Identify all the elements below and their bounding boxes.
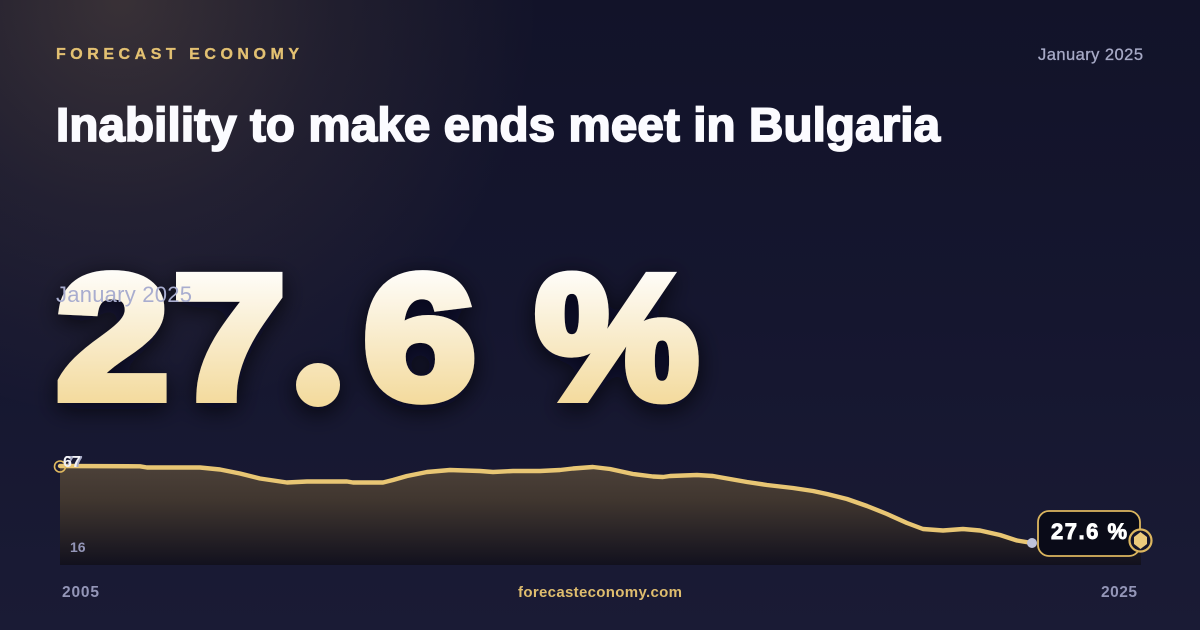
start marker xyxy=(54,461,66,472)
big value: . xyxy=(306,351,319,395)
brand label: FORECAST ECONOMY xyxy=(56,46,299,63)
website: forecasteconomy.com xyxy=(518,584,682,601)
big value: 7 xyxy=(173,239,286,436)
big value: 2 xyxy=(56,239,169,436)
trend line xyxy=(60,466,1032,543)
big value: % xyxy=(536,239,698,436)
previous point dot xyxy=(1027,538,1037,548)
big value: 6 xyxy=(363,239,476,436)
max label: 67 xyxy=(63,454,81,471)
value badge: 27.6 % xyxy=(1051,519,1127,544)
title: Inability to make ends meet in Bulgaria xyxy=(56,99,941,152)
start year: 2005 xyxy=(62,584,99,601)
area fill xyxy=(60,466,1141,565)
end marker xyxy=(1130,530,1152,552)
min label: 16 xyxy=(70,539,86,555)
date top right: January 2025 xyxy=(1038,46,1143,64)
end year: 2025 xyxy=(1101,584,1137,601)
date overlay: January 2025 xyxy=(56,282,192,307)
big value xyxy=(56,239,698,436)
value badge xyxy=(1038,511,1140,556)
max label: 77 xyxy=(65,454,83,471)
line chart xyxy=(54,454,1152,565)
